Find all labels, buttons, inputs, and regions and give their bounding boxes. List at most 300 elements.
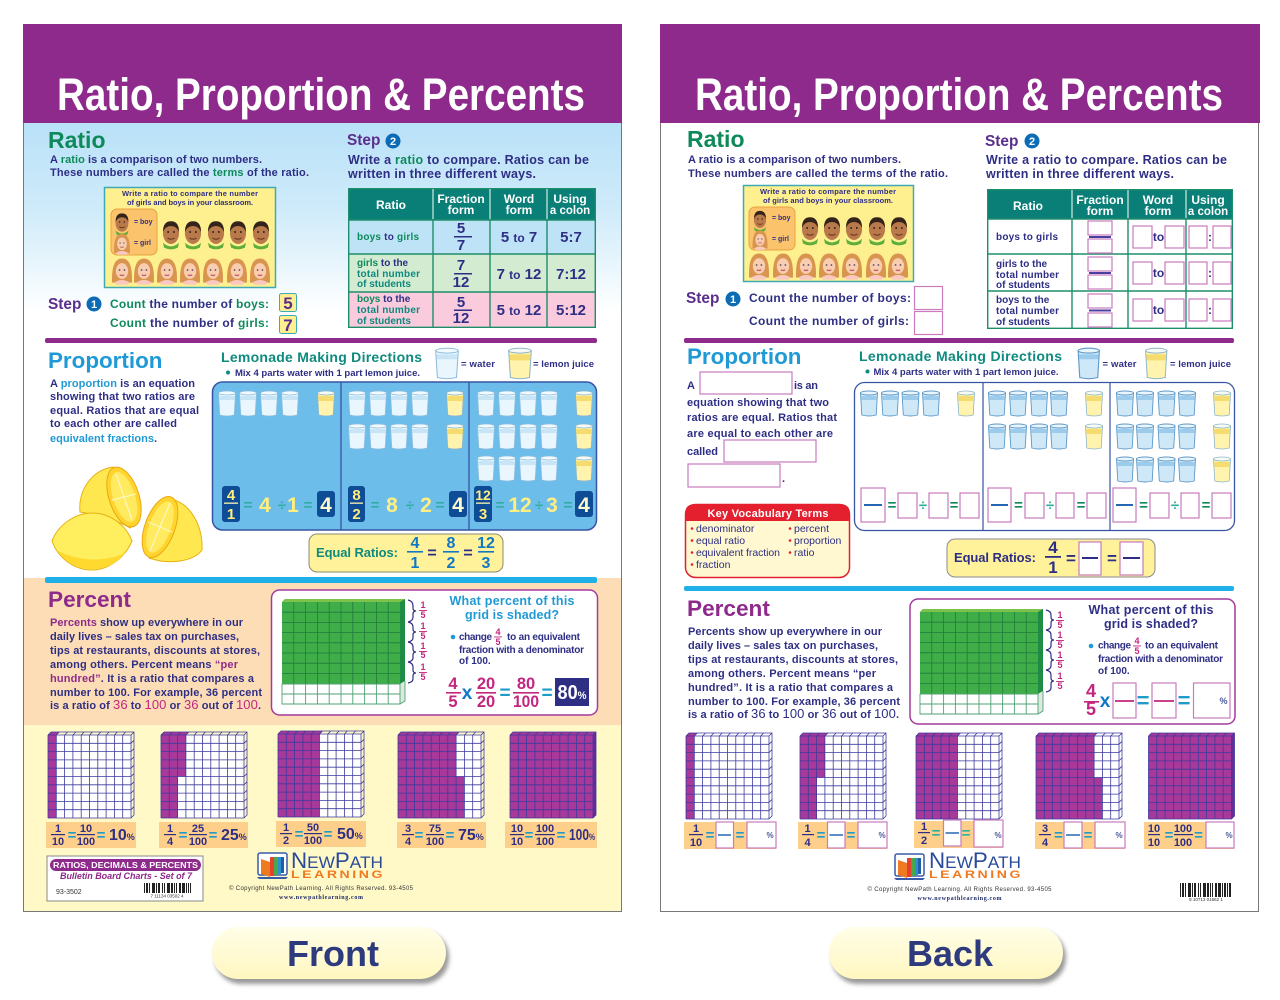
ratio definition: A ratio is a comparison of two numbers. [688,154,901,166]
label: 3/4 = 75%: 75 [429,823,441,835]
label: 1/4 = 25%: 100 [189,836,207,848]
panel: lemonade glasses and equations: 3 [546,494,558,517]
panel: percent grid: 4 [1086,681,1096,701]
key vocabulary box: denominator [696,523,755,535]
label: 10/10 = 100%: = [557,827,566,844]
label: 10/10 = 100%: = [525,827,534,844]
legend: glasses [1078,348,1231,379]
grid: 1/4 [800,733,886,819]
product label [47,856,203,901]
heading: proportion: Proportion [48,348,162,373]
key vocabulary box: ratio [794,547,815,559]
lemonade heading: Mix 4 parts water with 1 part lemon juice. [874,367,1058,378]
panel: percent grid: 80 [517,675,535,693]
label: 1/10 = 10%: 10% [109,827,135,844]
key vocabulary box: equal ratio [696,535,745,547]
table: ratio forms: of students [357,279,411,290]
grid: 1/2 [916,733,1002,819]
product label: 93-3502 [56,889,82,896]
step 2: Step [347,132,380,149]
panel: percent grid [272,590,598,715]
blank label: 3/4: = [1054,827,1063,844]
panel: lemonade glasses and equations: 12 [475,487,491,503]
label: 1/4 = 25%: 1 [167,823,173,835]
table: blank ratio forms: of students [996,317,1050,328]
grid: 25 percent [161,732,247,818]
ratio definition: These numbers are called the terms of the ratio. [688,168,948,180]
panel: percent grid: grid is shaded? [465,608,559,622]
key vocabulary box: percent [794,523,829,535]
logo: NewPath Learning: NEWPATH [291,848,383,873]
blank label: 1/10 [684,822,776,849]
panel: percent grid: 1 [420,662,426,672]
label: 1/10 = 10%: = [97,827,106,844]
step 1: Count the number of girls: [749,314,909,328]
barcode [1180,890,1231,902]
table: ratio forms: 7 [457,257,465,274]
ratio section background [24,123,621,339]
label: 1/2 = 50%: = [295,826,304,843]
heading: ratio: Ratio [48,127,106,153]
panel: blank lemonade equations: = [1139,497,1148,514]
panel: blank lemonade equations: ÷ [1171,497,1179,514]
classroom picture panel: = girl [134,240,151,247]
panel: percent grid: % [1219,696,1228,706]
blank label: 1/2: % [994,831,1002,840]
blank label: 1/10: % [766,831,774,840]
label: 1/10 = 10%: 1 [55,823,61,835]
heading: percent: Percent [687,596,770,621]
blank label: 1/10: = [736,827,745,844]
grid: 75 percent [398,732,484,818]
panel: lemonade glasses and equations: = [371,497,380,514]
percent definition: is a ratio of 36 to 100 or 36 out of 100. [688,706,899,721]
panel: lemonade glasses and equations: ÷ [535,497,543,514]
equal ratios box: 4 [411,535,420,552]
blank label: 1/4 [798,822,887,849]
blank label: 1/10: 10 [690,837,702,849]
blank label: 1/4: = [817,827,826,844]
bottom section background [24,725,621,911]
equal ratios box: 8 [447,535,456,552]
panel: percent grid: to an equivalent [507,632,581,643]
grid: 1/10 [686,733,772,819]
label: 1/2 = 50%: 50 [307,822,319,834]
table: ratio forms: 5 to 12 [497,302,541,319]
panel: blank lemonade equations [854,382,1234,531]
panel: percent grid: 1 [420,600,426,610]
copyright: © Copyright NewPath Learning. All Rights Reserved. 93-4505 [868,886,1052,893]
table: blank ratio forms: Using [1191,193,1225,207]
panel: lemonade glasses and equations: 4 [259,494,271,517]
proportion fill-in text: equation showing that two [687,397,829,409]
panel: lemonade glasses and equations: = [244,497,253,514]
equal ratios box: 4 [1048,538,1058,557]
label: 10/10 = 100%: 100 [536,823,554,835]
panel: lemonade glasses and equations: 2 [352,506,361,523]
heading: percent: Percent [48,587,131,612]
blank label: 3/4: % [1115,831,1123,840]
panel: blank lemonade equations: ÷ [919,497,927,514]
panel: percent grid: of 100. [1098,666,1130,677]
panel: percent grid: x [1100,691,1111,712]
proportion fill-in text [687,372,837,487]
panel: percent grid: 5 [1057,681,1063,691]
percent definition: tips at restaurants, discounts at stores, [688,654,898,666]
equal ratios box: = [1107,549,1117,568]
table: blank ratio forms: Ratio [1013,199,1043,213]
label: 10/10 = 100%: 10 [511,823,523,835]
grid: 10 percent [48,732,134,818]
label: 1/4 = 25%: = [179,827,188,844]
table: ratio forms: form [506,203,532,217]
blank label: 1/10: 1 [693,823,699,835]
label: 3/4 = 75%: 75% [458,827,484,844]
percent definition [50,617,262,712]
table: blank ratio forms: to [1153,230,1164,244]
table: ratio forms: Ratio [376,198,406,212]
step 1: Step [686,290,719,307]
blank label: 3/4: 4 [1042,837,1049,849]
table: blank ratio forms: boys to girls [996,232,1058,243]
label: 1/4 = 25%: 25% [221,827,247,844]
label: 3/4 = 75%: 4 [405,836,412,848]
equal ratios box: Equal Ratios: [954,550,1036,565]
classroom picture panel: = girl [772,236,789,243]
blank label: 1/4: 1 [804,823,811,835]
panel: percent grid: 1 [1057,610,1063,620]
percent section background [24,578,621,725]
ratio definition [50,154,309,179]
blank label: 3/4: = [1084,827,1093,844]
copyright [229,885,414,901]
classroom picture panel: Write a ratio to compare the number [760,187,896,196]
step 1: Step [48,296,81,313]
blank label: 1/4: 4 [804,837,811,849]
step 2 [347,132,589,181]
button: front [212,927,449,984]
copyright: www.newpathlearning.com [918,896,1002,902]
panel: percent grid: 1 [420,641,426,651]
grid: 10/10 [1148,733,1234,819]
table: blank ratio forms: of students [996,280,1050,291]
step 2: 2 [390,136,396,148]
poster: back [660,24,1260,912]
logo: NewPath Learning: LEARNING [291,869,385,881]
blank label: 10/10 [1144,822,1234,849]
blank label: 10/10: % [1225,831,1233,840]
equal ratios box: 3 [482,555,491,572]
blank label: 1/10: = [706,827,715,844]
percent definition: among others. Percent means “per [688,668,877,680]
table: blank ratio forms: to [1153,303,1164,317]
copyright [868,886,1052,902]
panel: percent grid: = [499,683,511,704]
equal ratios box: 2 [447,555,456,572]
equal ratios box: 12 [477,535,495,552]
equal ratios box [309,534,503,572]
table: ratio forms: 7 [457,237,465,254]
table: blank ratio forms: : [1208,266,1212,280]
table: ratio forms: total number [357,269,420,280]
panel: percent grid: = [541,683,553,704]
equal ratios box: = [427,545,437,562]
panel: blank lemonade equations: = [950,497,959,514]
panel: percent grid: fraction with a denominator [459,645,584,656]
step 2 [985,133,1227,181]
panel: percent grid: 5 [420,672,426,682]
panel: percent grid: 5 [420,610,426,620]
blank label: 1/4: = [847,827,856,844]
key vocabulary box: Key Vocabulary Terms [708,508,828,520]
table: blank ratio forms [987,189,1233,329]
key vocabulary box: proportion [794,535,841,547]
poster: front [23,24,622,912]
step 1: Count the number of girls: [110,316,269,330]
percent definition: is a ratio of 36 to 100 or 36 out of 100. [50,697,261,712]
panel: lemonade glasses and equations: 1 [227,506,235,523]
table: blank ratio forms: total number [996,270,1059,281]
panel: lemonade glasses and equations: ÷ [278,497,286,514]
blank label: 3/4 [1035,822,1125,849]
blank label: 1/4: % [878,831,886,840]
panel: blank lemonade equations: = [1014,497,1023,514]
legend: glasses: = water [1102,359,1137,370]
label: 1/2 = 50%: 2 [283,835,289,847]
table: ratio forms: 5 [457,220,465,237]
panel: lemonade glasses and equations [212,382,596,530]
panel: percent grid: 5 [1057,660,1063,670]
button: back: Back [907,933,994,974]
heading: proportion: Proportion [687,344,801,369]
panel: percent grid: 1 [1057,630,1063,640]
table: ratio forms: of students [357,316,411,327]
panel: lemonade glasses and equations: 12 [508,494,532,517]
label: 1/4 = 25% [159,822,248,848]
percent definition: number to 100. For example, 36 percent [50,687,262,699]
label: 1/10 = 10%: 10 [80,823,92,835]
table: ratio forms: total number [357,305,420,316]
equal ratios box: = [1066,549,1076,568]
panel: percent grid: 1 [1057,650,1063,660]
legend: glasses: = water [461,359,495,370]
proportion fill-in text: A [687,380,695,392]
panel: percent grid: 4 [448,675,458,693]
panel: lemonade glasses and equations: 8 [386,494,398,517]
table: ratio forms: Word [504,192,534,206]
table: ratio forms: boys to girls [357,232,419,243]
percent definition [688,626,900,721]
table: ratio forms: Fraction [437,192,485,206]
proportion definition: equal. Ratios that are equal [50,405,199,417]
table: blank ratio forms: : [1208,230,1212,244]
panel: percent grid: x [462,683,473,704]
blank label: 10/10: = [1165,827,1174,844]
ratio definition: These numbers are called the terms of the ratio. [50,167,309,179]
table: blank ratio forms: girls to the [996,259,1048,270]
panel: percent grid: 80% [558,682,587,704]
panel: percent grid: 5 [420,631,426,641]
label: 3/4 = 75%: = [446,827,455,844]
table: ratio forms: 5 to 7 [501,229,537,246]
label: 10/10 = 100%: 100 [536,836,554,848]
title: Ratio, Proportion & Percents [57,69,585,120]
divider [684,338,1234,343]
divider [684,586,1234,591]
blank label: 10/10: = [1194,827,1203,844]
panel: percent grid: 4 [1134,636,1140,646]
proportion definition: equivalent fractions. [50,433,157,445]
classroom picture panel: Write a ratio to compare the number [122,189,258,198]
lemonade heading [859,348,1062,378]
panel: percent grid: 1 [1057,671,1063,681]
panel: percent grid: What percent of this [1088,603,1214,617]
ratio definition [688,154,948,180]
label: 10/10 = 100%: 100% [569,827,595,844]
panel: lemonade glasses and equations: 4 [578,494,590,517]
label: 3/4 = 75% [397,822,486,848]
panel: lemonade glasses and equations: 3 [479,506,487,523]
step 1: 7 [283,316,293,335]
table: blank ratio forms: form [1145,204,1171,218]
panel: lemonade glasses and equations: 4 [227,487,236,504]
table: blank ratio forms: Fraction [1076,193,1124,207]
classroom picture panel: = boy [134,219,153,226]
label: 1/10 = 10%: 10 [52,836,64,848]
panel: lemonade glasses and equations: 2 [420,494,432,517]
lemonade heading [221,349,422,379]
barcode: 8 10713 01662 1 [1189,897,1223,902]
panel: percent grid: 4 [495,627,501,637]
panel: blank lemonade equations: = [888,497,897,514]
step 2: Step [985,133,1018,150]
panel: lemonade glasses and equations: 1 [287,494,299,517]
logo: NewPath Learning [894,848,1023,881]
panel: lemonade glasses and equations: 4 [452,494,464,517]
blank label: 10/10: 10 [1148,823,1160,835]
table: blank ratio forms: total number [996,306,1059,317]
panel: percent grid: change [459,632,492,643]
equal ratios box: 1 [1048,558,1058,577]
panel: percent grid: 5 [1057,640,1063,650]
lemonade heading: Mix 4 parts water with 1 part lemon juice. [235,368,420,379]
step 1 [48,294,296,335]
product label: Bulletin Board Charts - Set of 7 [60,871,193,881]
panel: percent grid: 5 [1086,699,1096,719]
key vocabulary box [685,504,850,578]
label: 10/10 = 100%: 10 [511,836,523,848]
table: blank ratio forms: a colon [1188,206,1228,218]
icon: lemons [52,463,202,570]
classroom picture panel [744,186,914,282]
step 1: Count the number of boys: [749,291,911,305]
label: 1/2 = 50% [276,821,366,847]
table: ratio forms: girls to the [357,258,409,269]
panel: percent grid: 1 [420,621,426,631]
panel: percent grid: = [1178,688,1190,713]
blank label: 1/2 [914,820,1003,848]
proportion fill-in text: called [687,446,718,458]
label: 1/2 = 50%: 100 [304,835,322,847]
proportion fill-in text: ratios are equal. Ratios that [687,412,837,424]
panel: percent grid: grid is shaded? [1104,617,1198,631]
panel: percent grid: fraction with a denominator [1098,654,1223,665]
product label: RATIOS, DECIMALS & PERCENTS [53,861,199,870]
table: ratio forms: 7:12 [556,266,586,283]
panel: lemonade glasses and equations: ÷ [406,497,414,514]
panel: percent grid: 20 [477,693,495,711]
percent definition: hundred”. It is a ratio that compares a [688,682,894,694]
legend: glasses: = lemon juice [533,359,594,370]
legend: glasses [436,348,594,379]
table: ratio forms: a colon [550,205,590,217]
table: ratio forms: 5 [457,294,465,311]
proportion definition: to each other are called [50,418,177,430]
table: blank ratio forms: boys to the [996,295,1050,306]
label: 1/10 = 10%: = [68,827,77,844]
button: back [829,927,1066,984]
step 1: 1 [730,294,736,306]
label: 1/10 = 10% [46,822,136,848]
equal ratios box [947,538,1155,577]
proportion fill-in text: is an [794,380,818,392]
table: blank ratio forms: to [1153,266,1164,280]
label: 3/4 = 75%: 3 [405,823,411,835]
step 2: written in three different ways. [985,167,1174,181]
label: 1/2 = 50%: 50% [337,826,363,843]
table: ratio forms: boys to the [357,294,411,305]
copyright: www.newpathlearning.com [279,895,363,901]
classroom picture panel: = boy [772,215,791,222]
panel: blank lemonade equations: ÷ [1046,497,1054,514]
key vocabulary box: equivalent fraction [696,547,780,559]
label: 1/2 = 50%: = [324,826,333,843]
blank label: 10/10: 100 [1174,823,1192,835]
grid: 100 percent [510,732,596,818]
panel: percent grid: 100 [513,693,539,711]
label: 3/4 = 75%: = [415,827,424,844]
equal ratios box: Equal Ratios: [316,545,398,560]
percent definition: Percents show up everywhere in our [50,617,244,629]
key vocabulary box: fraction [696,559,731,571]
classroom picture panel: of girls and boys in your classroom. [763,196,893,205]
blank label: 3/4: 3 [1042,823,1048,835]
label: 1/10 = 10%: 100 [77,836,95,848]
table: blank ratio forms: : [1208,303,1212,317]
panel: lemonade glasses and equations: = [496,497,505,514]
divider [45,338,597,343]
panel: lemonade glasses and equations: = [304,497,313,514]
panel: percent grid: 5 [1057,620,1063,630]
percent definition: hundred”. It is a ratio that compares a [50,673,255,685]
panel: percent grid: 5 [448,693,458,711]
table: blank ratio forms: form [1087,204,1113,218]
button: front: Front [287,933,379,974]
percent definition: among others. Percent means “per [50,659,239,671]
grid: 3/4 [1036,733,1122,819]
panel: percent grid: What percent of this [450,594,575,608]
blank label: 1/2: = [962,825,971,842]
label: 1/4 = 25%: 4 [167,836,174,848]
panel: blank lemonade equations: = [1077,497,1086,514]
panel: lemonade glasses and equations: 8 [352,487,361,504]
table: ratio forms: 5:12 [556,302,586,319]
table: ratio forms: 5:7 [560,229,582,246]
blank label: 1/2: 1 [921,821,927,833]
lemonade heading: Lemonade Making Directions [221,349,422,365]
panel: percent grid: of 100. [459,656,491,667]
panel: percent grid [910,599,1235,724]
